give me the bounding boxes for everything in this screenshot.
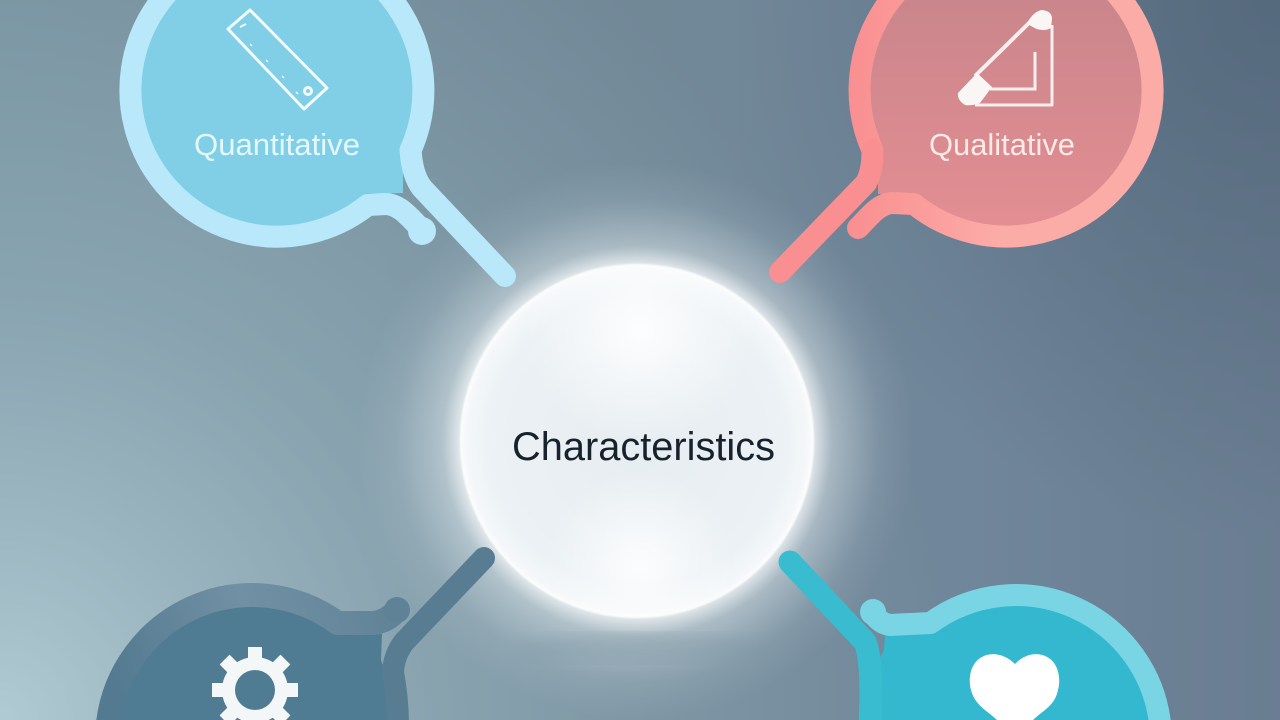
bubble: Qualitative	[780, 0, 1153, 272]
bubble: bottom right (heart)	[778, 550, 1160, 720]
icon: ruler	[228, 10, 327, 109]
bubble: Quantitative	[130, 0, 505, 276]
icon: pencil	[958, 10, 1052, 105]
central glow	[358, 162, 916, 720]
icon: heart	[970, 654, 1059, 720]
sphere shadow	[515, 634, 765, 662]
label: Characteristics: Characteristics	[512, 425, 775, 469]
icon: gear	[212, 647, 298, 720]
central sphere: Characteristics	[460, 264, 814, 618]
label: Qualitative: Qualitative	[929, 127, 1075, 162]
label: Quantitative: Quantitative	[194, 127, 360, 162]
bubble: bottom left (gear)	[108, 547, 495, 720]
